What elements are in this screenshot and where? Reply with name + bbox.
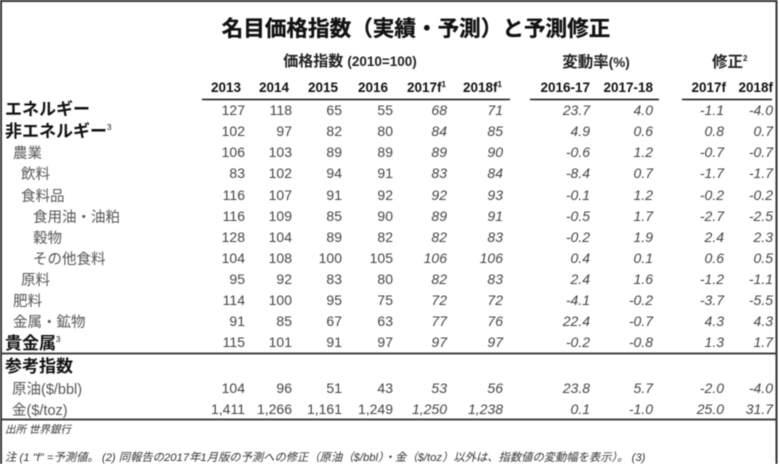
row labels: 食料品 — [21, 188, 64, 205]
data: price index actuals: 94 — [326, 165, 342, 181]
data: price index actuals: 80 — [377, 123, 393, 139]
data: price index actuals: 95 — [229, 271, 245, 287]
data: forecasts, rates of change and revisions: -1.1 — [700, 102, 724, 118]
data: price index actuals: 109 — [269, 208, 292, 224]
data: price index actuals: 83 — [229, 165, 245, 181]
row labels: 穀物 — [33, 230, 62, 247]
data: forecasts, rates of change and revisions: 72 — [431, 292, 447, 308]
row labels — [5, 100, 120, 419]
data: forecasts, rates of change and revisions: 1.9 — [634, 229, 653, 245]
data: forecasts, rates of change and revisions: 1.2 — [634, 187, 653, 203]
data: forecasts, rates of change and revisions: 0.7 — [754, 123, 774, 139]
column headers: 2013 — [211, 80, 241, 95]
data: forecasts, rates of change and revisions: 1.6 — [634, 271, 653, 287]
data: price index actuals: 106 — [222, 144, 245, 160]
row labels: エネルギー — [5, 100, 90, 119]
data: price index actuals: 102 — [222, 123, 245, 139]
data: forecasts, rates of change and revisions: 4.3 — [754, 313, 773, 329]
data: forecasts, rates of change and revisions: -4.1 — [566, 292, 590, 308]
title: 名目価格指数（実績・予測）と予測修正 — [222, 16, 610, 41]
data: price index actuals: 85 — [326, 208, 342, 224]
data: forecasts, rates of change and revisions: -1.2 — [700, 271, 724, 287]
row labels: 参考指数 — [5, 357, 73, 376]
data: forecasts, rates of change and revisions: -5.5 — [749, 292, 773, 308]
data: forecasts, rates of change and revisions: 92 — [431, 187, 447, 203]
data: price index actuals: 43 — [377, 380, 393, 396]
data: forecasts, rates of change and revisions: 31.7 — [746, 401, 774, 417]
data: forecasts, rates of change and revisions: -1.7 — [700, 165, 725, 181]
data: forecasts, rates of change and revisions: -2.7 — [700, 208, 725, 224]
data: forecasts, rates of change and revisions: 23.8 — [562, 380, 590, 396]
data: price index actuals: 51 — [326, 380, 342, 396]
data: price index actuals: 97 — [276, 123, 292, 139]
row labels: 原油($/bbl) — [12, 381, 82, 398]
data: price index actuals: 116 — [223, 187, 245, 203]
data: price index actuals: 92 — [377, 187, 393, 203]
data: forecasts, rates of change and revisions: 83 — [487, 229, 503, 245]
data: forecasts, rates of change and revisions: 0.5 — [754, 250, 773, 266]
data: forecasts, rates of change and revisions: 22.4 — [562, 313, 590, 329]
data: forecasts, rates of change and revisions: 1.7 — [634, 208, 654, 224]
data: price index actuals: 127 — [222, 102, 245, 118]
row labels: 飲料 — [21, 166, 50, 183]
data: price index actuals: 102 — [269, 165, 292, 181]
group heading: rate of change: 変動率(%) — [562, 52, 630, 71]
column headers: 2014 — [259, 80, 289, 95]
data: forecasts, rates of change and revisions: -0.6 — [566, 144, 590, 160]
data: price index actuals: 105 — [370, 250, 393, 266]
data: price index actuals: 101 — [269, 334, 292, 350]
data: forecasts, rates of change and revisions: 0.1 — [634, 250, 653, 266]
section rules — [1, 354, 776, 420]
data: price index actuals: 91 — [377, 165, 393, 181]
data: price index actuals: 115 — [223, 334, 245, 350]
column headers: 2018f — [738, 80, 774, 95]
row labels: 食用油・油粕 — [33, 209, 120, 226]
data: price index actuals: 91 — [326, 187, 342, 203]
data: price index actuals: 103 — [269, 144, 292, 160]
data: price index actuals: 1,266 — [257, 401, 292, 417]
data: price index actuals: 107 — [269, 187, 292, 203]
row labels: 肥料 — [13, 293, 42, 310]
data: price index actuals: 104 — [222, 380, 245, 396]
data: forecasts, rates of change and revisions: 1.7 — [754, 334, 774, 350]
data: forecasts, rates of change and revisions: 4.0 — [634, 102, 653, 118]
data: price index actuals: 90 — [377, 208, 393, 224]
column headers: 2015 — [308, 80, 338, 95]
data: forecasts, rates of change and revisions: -0.8 — [629, 334, 653, 350]
data: price index actuals: 83 — [326, 271, 342, 287]
data: price index actuals: 104 — [269, 229, 292, 245]
header rules — [202, 98, 772, 100]
data: forecasts, rates of change and revisions: 4.3 — [705, 313, 724, 329]
data: price index actuals: 82 — [326, 123, 342, 139]
data: forecasts, rates of change and revisions: 83 — [487, 271, 503, 287]
data: forecasts, rates of change and revisions: -2.0 — [700, 380, 724, 396]
data: forecasts, rates of change and revisions: -0.1 — [566, 187, 590, 203]
data: forecasts, rates of change and revisions: 93 — [487, 187, 503, 203]
row labels: 金属・鉱物 — [13, 314, 86, 331]
data: price index actuals: 89 — [377, 144, 393, 160]
row labels: 金($/toz) — [12, 402, 68, 419]
data: forecasts, rates of change and revisions: 84 — [431, 123, 447, 139]
data: price index actuals: 1,161 — [307, 401, 342, 417]
source note: 出所 世界銀行 — [5, 424, 72, 436]
data: forecasts, rates of change and revisions: -0.7 — [629, 313, 654, 329]
row labels: 貴金属 — [5, 334, 56, 353]
data: forecasts, rates of change and revisions: 0.6 — [705, 250, 724, 266]
data: forecasts, rates of change and revisions: 97 — [431, 334, 448, 350]
data: price index actuals: 116 — [223, 208, 245, 224]
data: forecasts, rates of change and revisions — [412, 102, 774, 417]
data: forecasts, rates of change and revisions: 89 — [431, 208, 447, 224]
data: forecasts, rates of change and revisions: 85 — [487, 123, 503, 139]
data: price index actuals: 95 — [326, 292, 342, 308]
data: price index actuals: 67 — [326, 313, 342, 329]
data: forecasts, rates of change and revisions: 2.4 — [704, 229, 724, 245]
data: forecasts, rates of change and revisions: 5.7 — [634, 380, 654, 396]
data: forecasts, rates of change and revisions: 106 — [424, 250, 447, 266]
data: forecasts, rates of change and revisions: 84 — [487, 165, 503, 181]
data: forecasts, rates of change and revisions: 53 — [431, 380, 447, 396]
data: forecasts, rates of change and revisions: 71 — [487, 102, 503, 118]
column headers — [211, 80, 774, 95]
data: forecasts, rates of change and revisions: 82 — [431, 271, 447, 287]
data: forecasts, rates of change and revisions: -3.7 — [700, 292, 725, 308]
data: forecasts, rates of change and revisions: 89 — [431, 144, 447, 160]
data: forecasts, rates of change and revisions: 90 — [487, 144, 503, 160]
data: price index actuals: 89 — [326, 144, 342, 160]
data: forecasts, rates of change and revisions: -0.2 — [700, 187, 724, 203]
data: price index actuals: 114 — [223, 292, 245, 308]
data: forecasts, rates of change and revisions: 0.1 — [571, 401, 590, 417]
data: forecasts, rates of change and revisions: -0.2 — [749, 187, 773, 203]
data: forecasts, rates of change and revisions: -1.1 — [749, 271, 773, 287]
column headers: 2016-17 — [540, 80, 590, 95]
row labels: 農業 — [13, 145, 42, 162]
data: forecasts, rates of change and revisions: -0.2 — [629, 292, 653, 308]
data: forecasts, rates of change and revisions: 106 — [480, 250, 503, 266]
data: forecasts, rates of change and revisions: 76 — [487, 313, 503, 329]
data: forecasts, rates of change and revisions: -1.0 — [629, 401, 653, 417]
data: forecasts, rates of change and revisions: -8.4 — [566, 165, 590, 181]
column headers: 1 — [498, 80, 503, 89]
data: forecasts, rates of change and revisions: 83 — [431, 165, 447, 181]
data: forecasts, rates of change and revisions: -0.7 — [700, 144, 725, 160]
footnote: 注 (1 "f" =予測値。 (2) 同報告の2017年1月版の予測への修正（原油（$/bbl）・金（$/toz）以外は、指数値の変動幅を表示）。 (3) — [5, 451, 646, 464]
column headers: 2017f — [691, 80, 727, 95]
data: forecasts, rates of change and revisions: 56 — [487, 380, 503, 396]
data: forecasts, rates of change and revisions: -0.5 — [566, 208, 590, 224]
data: price index actuals: 91 — [326, 334, 342, 350]
data: forecasts, rates of change and revisions: -2.5 — [749, 208, 773, 224]
data: forecasts, rates of change and revisions: -4.0 — [749, 102, 773, 118]
data: price index actuals: 108 — [269, 250, 292, 266]
data: forecasts, rates of change and revisions: 0.8 — [705, 123, 724, 139]
data: price index actuals: 100 — [269, 292, 292, 308]
data: price index actuals: 82 — [377, 229, 393, 245]
data: forecasts, rates of change and revisions: 0.6 — [634, 123, 653, 139]
data: forecasts, rates of change and revisions: 2.3 — [753, 229, 773, 245]
data: forecasts, rates of change and revisions: 91 — [487, 208, 503, 224]
data: price index actuals: 65 — [326, 102, 342, 118]
data: forecasts, rates of change and revisions: 77 — [431, 313, 448, 329]
data: price index actuals: 104 — [222, 250, 245, 266]
column headers: 2018f — [463, 80, 498, 95]
data: forecasts, rates of change and revisions: 72 — [487, 292, 503, 308]
row labels: その他食料 — [33, 251, 106, 268]
data: forecasts, rates of change and revisions: 23.7 — [562, 102, 591, 118]
group heading: price index: 価格指数 (2010=100) — [283, 52, 417, 70]
row labels: 3 — [107, 123, 112, 132]
data: forecasts, rates of change and revisions: -0.7 — [749, 144, 774, 160]
data: price index actuals: 118 — [270, 102, 292, 118]
data: forecasts, rates of change and revisions: 1,238 — [468, 401, 503, 417]
data: forecasts, rates of change and revisions: 25.0 — [696, 401, 724, 417]
column headers: 2016 — [358, 80, 388, 95]
data: price index actuals: 80 — [377, 271, 393, 287]
data: forecasts, rates of change and revisions: 1.3 — [705, 334, 724, 350]
data: forecasts, rates of change and revisions: -1.7 — [749, 165, 774, 181]
column headers: 1 — [442, 80, 447, 89]
data: price index actuals: 63 — [377, 313, 393, 329]
data: forecasts, rates of change and revisions: 0.4 — [571, 250, 590, 266]
data: forecasts, rates of change and revisions: 2.4 — [570, 271, 590, 287]
data: forecasts, rates of change and revisions: -0.2 — [566, 334, 590, 350]
data: price index actuals: 92 — [276, 271, 292, 287]
data: price index actuals: 75 — [377, 292, 393, 308]
row labels: 非エネルギー — [5, 122, 107, 141]
column headers: 2017-18 — [603, 80, 653, 95]
data: price index actuals: 85 — [276, 313, 292, 329]
row labels: 3 — [56, 335, 61, 344]
data: forecasts, rates of change and revisions: 1.2 — [634, 144, 653, 160]
data: forecasts, rates of change and revisions: 82 — [431, 229, 447, 245]
data: forecasts, rates of change and revisions: 97 — [487, 334, 504, 350]
data: price index actuals: 91 — [229, 313, 245, 329]
data: price index actuals: 97 — [377, 334, 393, 350]
data: price index actuals: 1,249 — [358, 401, 393, 417]
data: forecasts, rates of change and revisions: -4.0 — [749, 380, 773, 396]
column headers: 2017f — [407, 80, 442, 95]
data: price index actuals: 96 — [276, 380, 292, 396]
data: forecasts, rates of change and revisions: 0.7 — [634, 165, 654, 181]
data: price index actuals: 100 — [319, 250, 342, 266]
data: price index actuals — [211, 102, 393, 417]
data: price index actuals: 128 — [222, 229, 245, 245]
group heading: revisions: 2 — [743, 54, 748, 63]
data: price index actuals: 1,411 — [211, 401, 245, 417]
data: forecasts, rates of change and revisions: -0.2 — [566, 229, 590, 245]
data: price index actuals: 89 — [326, 229, 342, 245]
group heading: revisions: 修正 — [712, 54, 743, 71]
data: forecasts, rates of change and revisions: 1,250 — [412, 401, 447, 417]
data: price index actuals: 55 — [377, 102, 393, 118]
data: forecasts, rates of change and revisions: 4.9 — [571, 123, 590, 139]
row labels: 原料 — [21, 272, 50, 289]
data: forecasts, rates of change and revisions: 68 — [431, 102, 447, 118]
